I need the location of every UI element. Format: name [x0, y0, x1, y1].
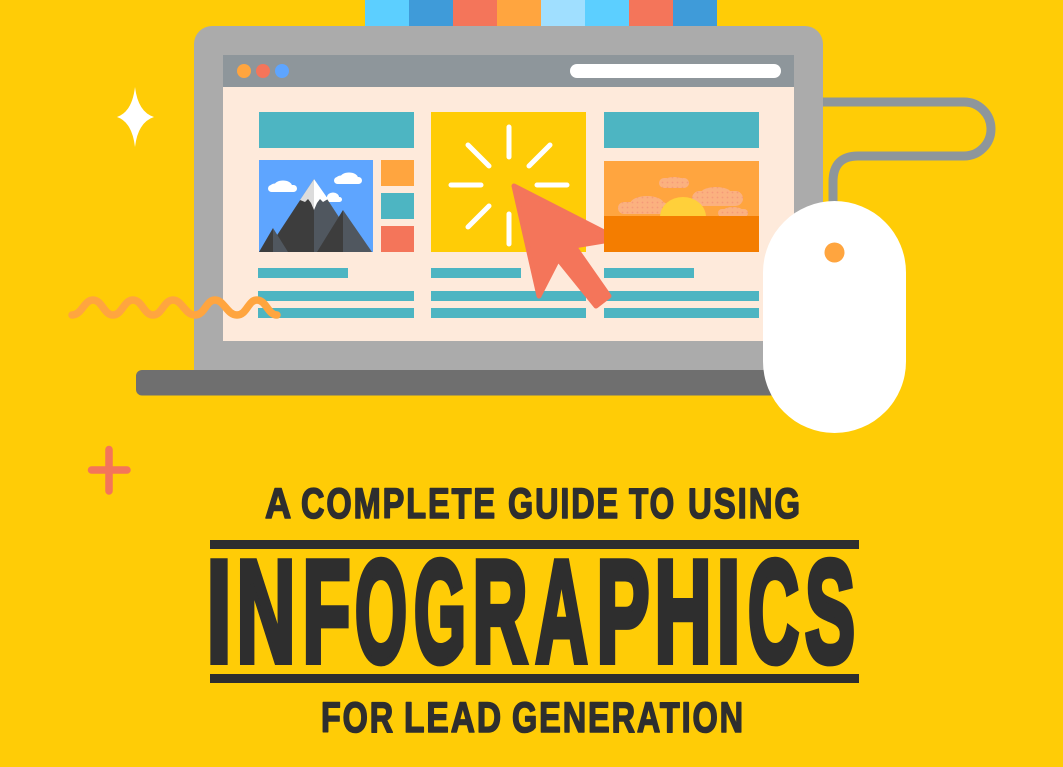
rule above title: [210, 540, 859, 549]
icon: sparkle star: [117, 87, 154, 147]
heading: main title: A: [536, 530, 588, 692]
colour strip above laptop: [365, 0, 717, 26]
icon: computer mouse: [763, 201, 906, 433]
heading: main title: O: [355, 530, 407, 692]
laptop base: [136, 370, 796, 396]
page column: centre: [431, 112, 586, 318]
icon: orange squiggle: [72, 300, 277, 315]
heading: main title: S: [805, 530, 855, 692]
browser toolbar: [223, 55, 794, 87]
icon: mouse cable: [820, 102, 991, 208]
icon: plus sign: [92, 450, 127, 491]
icon: cursor arrow: [514, 186, 609, 306]
heading: main title: R: [472, 530, 528, 692]
heading: main title: F: [302, 530, 350, 692]
laptop lid: [194, 26, 823, 372]
heading: main title: C: [748, 530, 799, 692]
heading: main title: N: [236, 530, 296, 692]
heading: bottom line: FOR: [321, 694, 395, 742]
heading: main title: P: [596, 530, 650, 692]
heading: top line: USING: [688, 480, 802, 528]
image: mountains: [259, 160, 373, 252]
page column: left: [258, 112, 414, 318]
image: sunset: [604, 161, 759, 252]
heading: main title: I: [206, 530, 232, 692]
web page: [223, 87, 794, 341]
heading: bottom line: LEAD: [404, 694, 503, 742]
page column: right: [604, 112, 759, 318]
heading: main title: G: [414, 530, 466, 692]
title block: [206, 480, 859, 742]
heading: top line: A: [265, 480, 292, 528]
laptop illustration: [136, 26, 823, 396]
heading: main title: H: [654, 530, 712, 692]
heading: top line: TO: [629, 480, 676, 528]
heading: top line: COMPLETE: [301, 480, 497, 528]
icon: click burst: [451, 127, 567, 244]
heading: bottom line: GENERATION: [512, 694, 745, 742]
heading: main title: I: [716, 530, 740, 692]
rule below title: [210, 674, 859, 683]
heading: top line: GUIDE: [508, 480, 620, 528]
